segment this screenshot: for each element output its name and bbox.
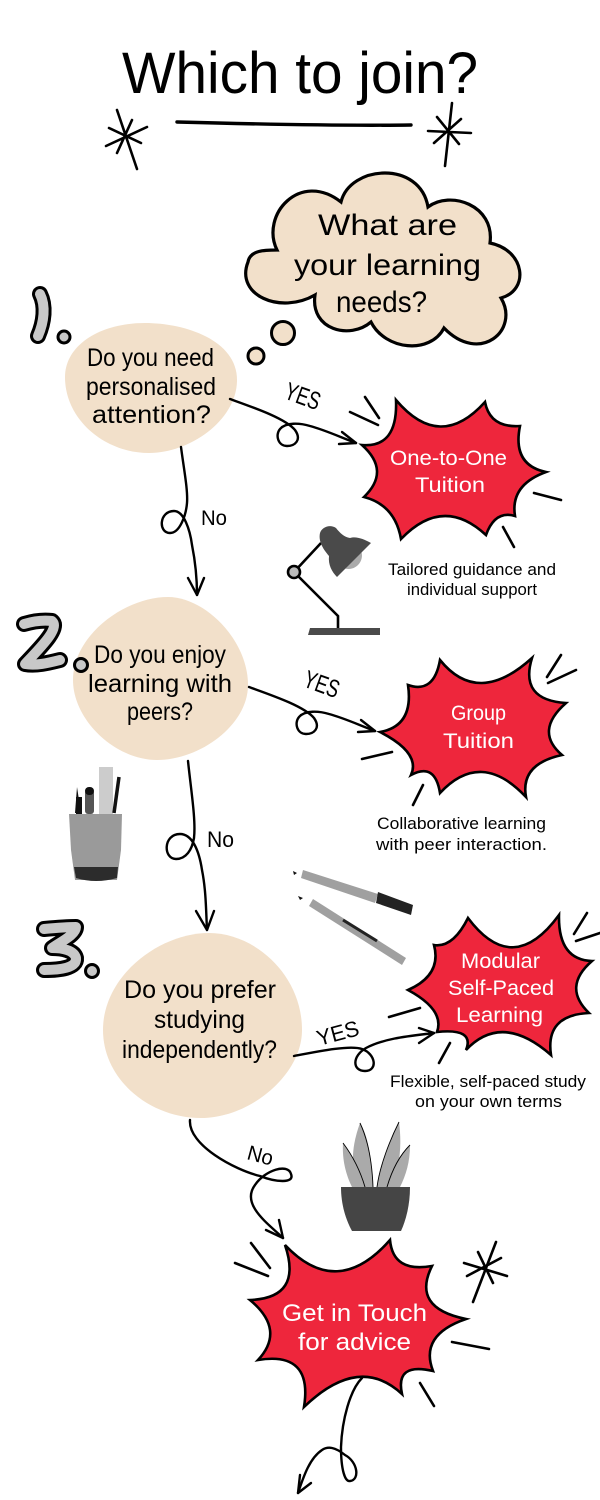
question 1 blob	[65, 323, 237, 453]
caption 3	[390, 1073, 587, 1111]
caption 2	[375, 815, 547, 854]
icon: right star	[428, 103, 471, 166]
icon: left star	[106, 110, 147, 169]
caption 3: on your own terms	[415, 1093, 562, 1111]
thought bubbles	[248, 322, 294, 364]
question 1 text: attention?	[92, 401, 211, 429]
label: no 3: No	[245, 1142, 276, 1171]
question 2 text: learning with	[88, 670, 232, 698]
arrow: bottom exit	[298, 1378, 362, 1493]
step number 1	[38, 294, 70, 343]
burst text: Tuition	[443, 730, 514, 753]
burst: one-to-one tuition	[362, 400, 546, 539]
arrow: question 3 yes	[294, 1028, 434, 1071]
icon: upper pen	[293, 870, 413, 915]
question 2 text: peers?	[127, 698, 193, 726]
caption 1	[388, 561, 556, 599]
arrow: question 1 no	[162, 447, 204, 595]
thought cloud	[246, 173, 520, 346]
burst: modular self-paced learning	[408, 915, 592, 1055]
burst text	[282, 1300, 427, 1356]
question 2 blob	[73, 597, 248, 760]
question 1 text: personalised	[86, 373, 216, 401]
burst text: Learning	[456, 1004, 543, 1027]
cloud text	[294, 209, 481, 319]
label: yes 1: YES	[281, 377, 324, 416]
burst text: Group	[451, 702, 506, 725]
caption 1: individual support	[407, 581, 537, 599]
caption 3: Flexible, self-paced study	[390, 1073, 587, 1091]
question 1 text	[86, 344, 216, 429]
cloud text: needs?	[336, 286, 427, 319]
title: Which to join?	[122, 41, 478, 106]
step number 3	[44, 927, 98, 978]
label: yes 3: YES	[314, 1016, 362, 1051]
icon: star near burst	[464, 1242, 507, 1302]
icon: lower pen	[298, 896, 406, 965]
burst text: for advice	[298, 1329, 411, 1356]
arrow: question 1 yes	[230, 399, 356, 446]
burst text: Self-Paced	[448, 977, 554, 1000]
question 3 text: Do you prefer	[124, 976, 276, 1004]
arrow: question 2 yes	[249, 687, 375, 734]
question 2 text: Do you enjoy	[94, 641, 226, 669]
burst text: Get in Touch	[282, 1300, 427, 1327]
burst: get in touch	[250, 1240, 466, 1407]
caption 2: with peer interaction.	[375, 836, 547, 854]
burst sparks 4	[235, 1243, 489, 1406]
burst sparks 1	[350, 397, 561, 547]
icon: pencil cup	[69, 767, 122, 881]
caption 1: Tailored guidance and	[388, 561, 556, 579]
label: yes 2: YES	[300, 665, 343, 704]
arrow: question 3 no	[190, 1120, 292, 1238]
burst text	[443, 702, 514, 753]
title underline	[177, 122, 411, 125]
burst sparks 2	[362, 655, 576, 805]
burst text	[448, 950, 554, 1027]
burst: group tuition	[380, 658, 566, 797]
burst text: One-to-One	[390, 447, 507, 470]
question 3 text: independently?	[122, 1036, 277, 1064]
burst text: Tuition	[415, 474, 485, 497]
arrow: question 2 no	[167, 761, 214, 930]
cloud text: What are	[318, 209, 457, 242]
burst text	[390, 447, 507, 497]
step number 2	[24, 621, 60, 665]
icon: potted plant	[341, 1122, 410, 1231]
label: no 2: No	[207, 827, 234, 852]
question 3 text	[122, 976, 277, 1064]
question 3 blob	[103, 933, 302, 1118]
question 3 text: studying	[154, 1006, 245, 1034]
burst text: Modular	[461, 950, 540, 973]
question 1 text: Do you need	[87, 344, 214, 372]
question 2 text	[88, 641, 232, 726]
caption 2: Collaborative learning	[377, 815, 546, 833]
burst sparks 3	[389, 913, 600, 1063]
cloud text: your learning	[294, 249, 481, 282]
label: no 1: No	[201, 507, 227, 530]
icon: desk lamp	[288, 526, 380, 635]
step 2 dot	[74, 658, 88, 672]
